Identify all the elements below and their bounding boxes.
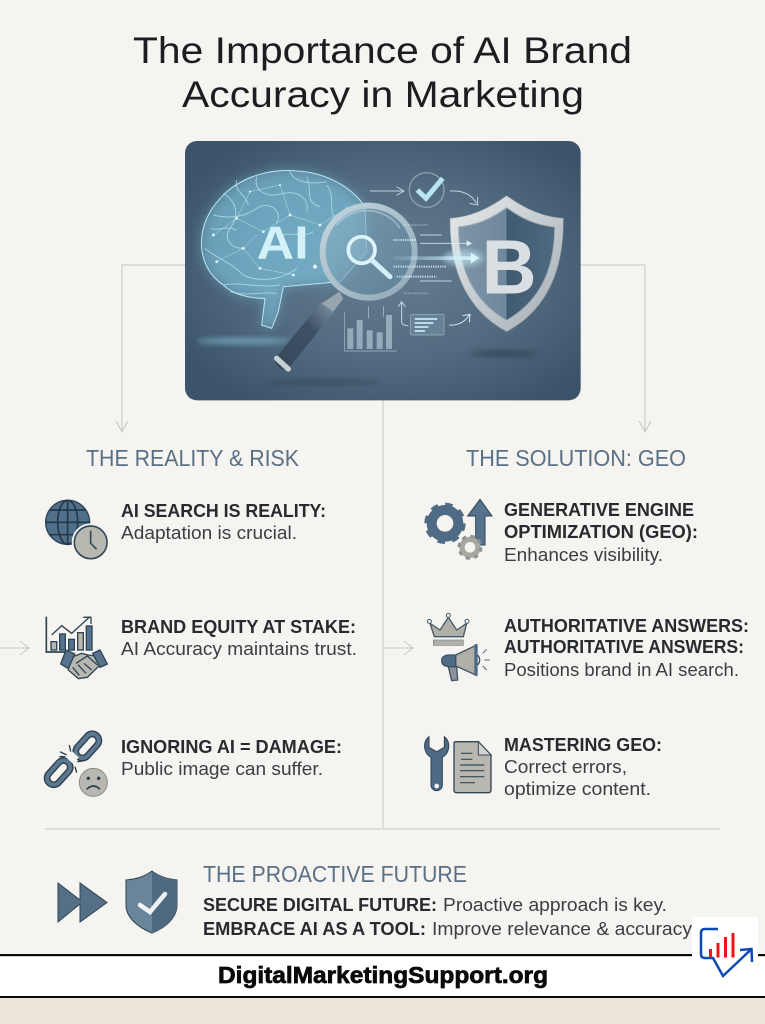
item: ignoring AI equals damage [121, 737, 342, 779]
text: secure digital future: SECURE DIGITAL FUTURE: [203, 895, 437, 915]
item: generative engine optimization: GENERATIVE ENGINE [504, 500, 694, 520]
data arrows [370, 187, 483, 293]
title: The Importance of AI Brand [133, 30, 632, 71]
item: mastering GEO: MASTERING GEO: [504, 735, 662, 755]
item: mastering GEO [504, 735, 662, 799]
panel: right column [425, 499, 749, 799]
item: brand equity at stake [121, 617, 357, 659]
item: ignoring AI equals damage: IGNORING AI = DAMAGE: [121, 737, 342, 757]
connector lines and arrows [0, 265, 720, 829]
item: mastering GEO: Correct errors, [504, 757, 627, 777]
mini bar chart [345, 307, 397, 351]
text: secure digital future [203, 895, 667, 915]
text: B logo: B [482, 225, 537, 311]
icon: brand shield [450, 196, 563, 332]
icon: globe and clock [46, 500, 110, 561]
icon: crown and megaphone [427, 613, 490, 681]
icon: logo badge [692, 917, 758, 979]
icon: magnifying glass [275, 206, 415, 369]
panel: the proactive future [58, 861, 692, 939]
title [133, 30, 632, 115]
item: authoritative answers: AUTHORITATIVE ANSWERS: [504, 616, 749, 636]
icon: gears and up arrow [427, 499, 492, 558]
section heading: the solution: THE SOLUTION: GEO [466, 445, 686, 471]
item: mastering GEO: optimize content. [504, 779, 651, 799]
panel: left column [44, 500, 357, 796]
card icon [398, 302, 470, 335]
text: embrace AI as a tool: EMBRACE AI AS A TOOL: [203, 919, 426, 939]
text: secure digital future: Proactive approach is key. [443, 895, 667, 915]
item: authoritative answers: AUTHORITATIVE ANSWERS: [504, 637, 744, 657]
footer band [0, 954, 765, 1024]
item: AI search is reality: Adaptation is crucial. [121, 523, 297, 543]
text: AI: AI [257, 216, 309, 268]
text: embrace AI as a tool: Improve relevance & accuracy [432, 919, 692, 939]
heading: the proactive future: THE PROACTIVE FUTURE [203, 861, 467, 887]
item: brand equity at stake: AI Accuracy maintains trust. [121, 639, 357, 659]
item: generative engine optimization [504, 500, 698, 565]
item: authoritative answers [504, 616, 749, 680]
title: Accuracy in Marketing [182, 74, 584, 115]
item: ignoring AI equals damage: Public image can suffer. [121, 759, 323, 779]
icon: chart and handshake [46, 617, 107, 679]
icon: check circle [409, 173, 444, 207]
section heading: the reality and risk: THE REALITY & RISK [86, 445, 300, 471]
icon: shield with check [126, 871, 177, 933]
text: embrace AI as a tool [203, 919, 692, 939]
item: brand equity at stake: BRAND EQUITY AT STAKE: [121, 617, 356, 637]
ground shadows [197, 338, 537, 385]
hero illustration panel [185, 141, 581, 400]
icon: glowing brain [201, 171, 367, 328]
footer website text: DigitalMarketingSupport.org [218, 962, 548, 988]
icon: double chevrons [58, 883, 107, 922]
item: AI search is reality [121, 501, 326, 543]
item: generative engine optimization: Enhances visibility. [504, 545, 663, 565]
item: generative engine optimization: OPTIMIZATION (GEO): [504, 522, 698, 542]
item: AI search is reality: AI SEARCH IS REALITY: [121, 501, 326, 521]
icon: wrench and document [425, 737, 491, 793]
item: authoritative answers: Positions brand in AI search. [504, 660, 739, 680]
icon: broken chain and sad face [44, 731, 107, 796]
